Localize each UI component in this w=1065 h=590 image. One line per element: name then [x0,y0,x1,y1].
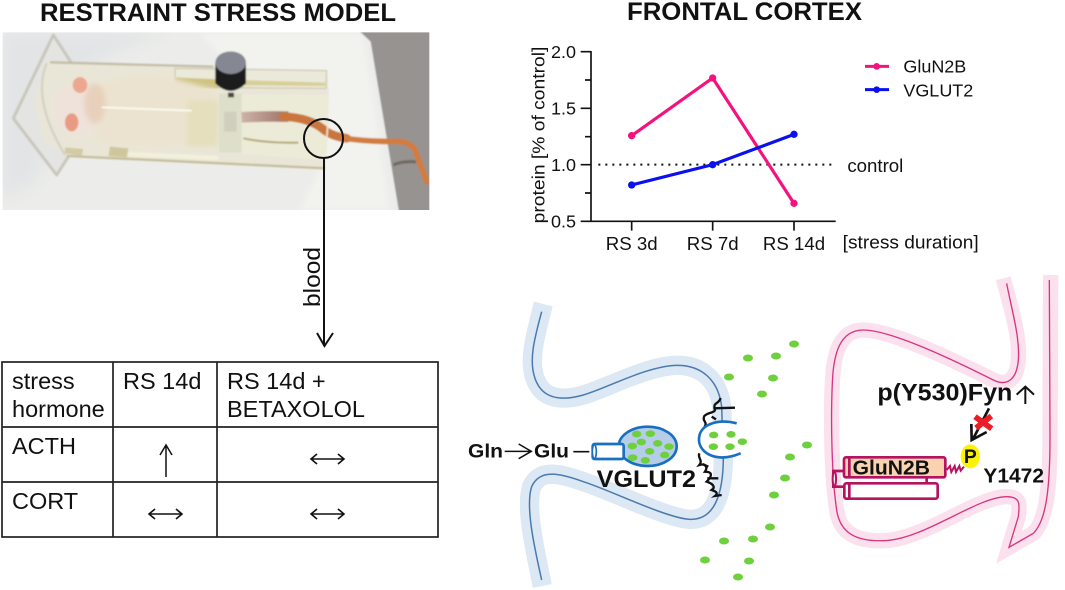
label: Gln to Glu: Glu [534,442,569,463]
legend: VGLUT2 [865,81,973,101]
row: ACTH: ACTH [12,433,76,459]
table header [12,368,365,422]
series: GluN2B [628,74,798,207]
label: GluN2B: GluN2B [853,457,930,479]
label: blood: blood [299,247,325,307]
post and knob [219,93,242,153]
rod [175,68,327,88]
y axis title: protein [% of control] [528,47,548,223]
label: VGLUT2: VGLUT2 [597,466,696,493]
rat head [54,82,102,134]
arrow: blood collection to hormone table [317,158,333,346]
table: stress hormones [2,362,438,537]
presynaptic neuron [468,304,747,586]
row: CORT [12,488,344,519]
x axis title: [stress duration] [843,231,979,252]
axes [581,51,836,231]
membrane: presynaptic terminal [529,304,723,586]
postsynaptic neuron [832,275,1051,547]
legend: VGLUT2: VGLUT2 [903,81,973,101]
table header: stress [12,368,75,394]
table header: RS 14d [123,368,201,394]
y axis tick labels [551,42,576,232]
label: p(Y530)Fyn up: p(Y530)Fyn [877,379,1012,406]
GluN2B receptor [833,457,964,499]
y axis tick labels: 2.0 [551,42,576,62]
series: VGLUT2 [628,131,798,189]
x axis labels [606,233,825,254]
legend: GluN2B [865,57,966,77]
table header: RS 14d + [227,368,326,394]
label: control: control [847,155,903,176]
x axis labels: RS 3d [606,233,658,254]
label: Y1472: Y1472 [983,465,1044,488]
label: Gln to Glu [468,442,589,463]
line chart: protein vs stress duration [528,42,979,254]
phosphate P: P [964,447,977,468]
x axis labels: RS 7d [687,233,739,254]
end plate [13,35,72,175]
rat body [98,78,216,142]
tube [35,62,329,168]
blocked arrow [971,408,992,440]
vesicle with VGLUT2 transporter [592,427,677,466]
phosphate P [961,444,980,468]
control line [598,162,836,168]
row: ACTH [12,433,344,477]
x axis labels: RS 14d [763,233,825,254]
membrane: postsynaptic spine [832,275,1051,547]
table header: BETAXOLOL [227,396,365,422]
y axis tick labels: 1.5 [551,99,576,119]
tail [241,110,289,124]
y axis tick labels: 1.0 [551,155,576,175]
table header: hormone [12,396,105,422]
y axis tick labels: 0.5 [551,212,576,232]
legend: GluN2B: GluN2B [903,57,966,77]
row: CORT: CORT [12,488,78,514]
SNARE proteins [699,398,735,496]
fusing vesicle [699,422,747,457]
glutamate in synaptic cleft [700,340,812,580]
label: Gln to Glu: Gln [468,442,503,463]
photo: rat in restraint tube [0,30,432,212]
circle marking blood collection site [304,119,343,158]
